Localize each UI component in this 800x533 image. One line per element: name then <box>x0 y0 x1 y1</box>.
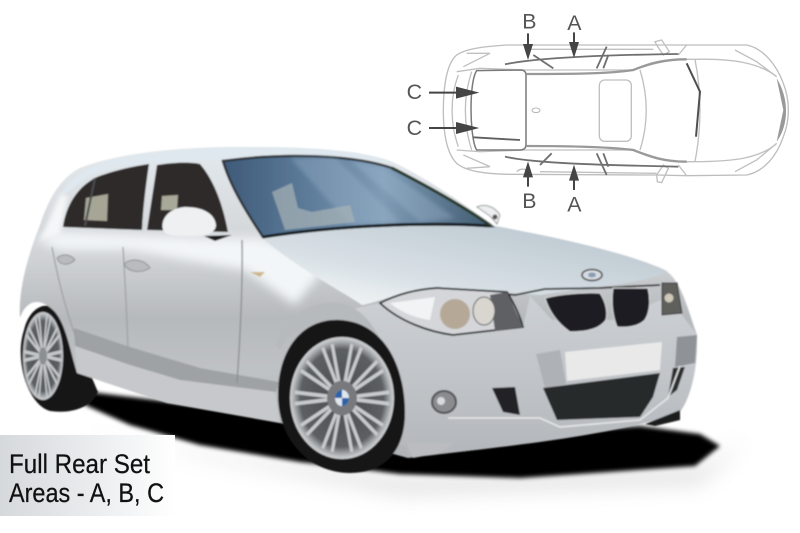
bumper corner panel <box>675 335 697 367</box>
label A top: A <box>567 11 582 35</box>
tailgate outline <box>471 70 526 150</box>
mudflap <box>407 443 455 458</box>
fender arch band <box>275 302 405 445</box>
front side window <box>147 163 228 232</box>
left headlight <box>380 288 523 335</box>
caption line 2: Areas - A, B, C <box>9 478 164 508</box>
door seams and handles <box>52 240 265 383</box>
lower grille <box>543 373 660 420</box>
rear wheel <box>21 306 98 412</box>
car body <box>20 147 697 458</box>
arrow A top <box>569 32 579 58</box>
roof <box>60 147 395 195</box>
side window frames <box>473 47 687 175</box>
arrow C lower <box>429 122 479 134</box>
front windscreen line <box>687 63 700 137</box>
far-side mirror <box>477 205 500 224</box>
bumper lower creases <box>448 366 680 427</box>
car photo illustration <box>20 147 697 473</box>
arrow B top <box>523 33 533 60</box>
kidney grille right <box>612 288 650 327</box>
inner body lines <box>452 40 777 183</box>
label B top: B <box>522 9 536 33</box>
right headlight <box>662 283 682 315</box>
hood shut line <box>380 285 660 303</box>
ground shadow <box>30 392 745 492</box>
caption panel <box>0 435 175 516</box>
left air intake <box>492 387 520 415</box>
number plate area <box>536 342 662 388</box>
roof aerial <box>532 108 540 113</box>
arrow A bottom <box>569 165 579 190</box>
caption line 1: Full Rear Set <box>9 449 150 479</box>
fog lamp <box>432 391 456 413</box>
right air intake <box>668 367 685 397</box>
arrow C upper <box>429 87 479 99</box>
windshield <box>223 156 491 237</box>
label A bottom: A <box>567 192 582 216</box>
front wheel <box>278 320 405 473</box>
label B bottom: B <box>522 189 536 213</box>
badge on hood <box>582 270 602 280</box>
lower door trim band <box>74 328 279 392</box>
label C upper: C <box>407 80 422 104</box>
arrow B bottom <box>523 161 533 187</box>
hood <box>262 224 667 305</box>
front bumper <box>348 296 697 455</box>
light shoulder highlight <box>35 232 330 305</box>
label C lower: C <box>407 116 422 140</box>
outer body outline <box>443 45 788 176</box>
rear side window <box>63 164 149 230</box>
door mirror <box>162 207 232 241</box>
kidney grille left <box>545 293 607 332</box>
rear pillar highlight <box>40 195 68 240</box>
grille detail <box>777 78 786 142</box>
top-view car diagram <box>407 9 788 216</box>
side sill <box>75 346 280 423</box>
front lip <box>645 410 680 426</box>
